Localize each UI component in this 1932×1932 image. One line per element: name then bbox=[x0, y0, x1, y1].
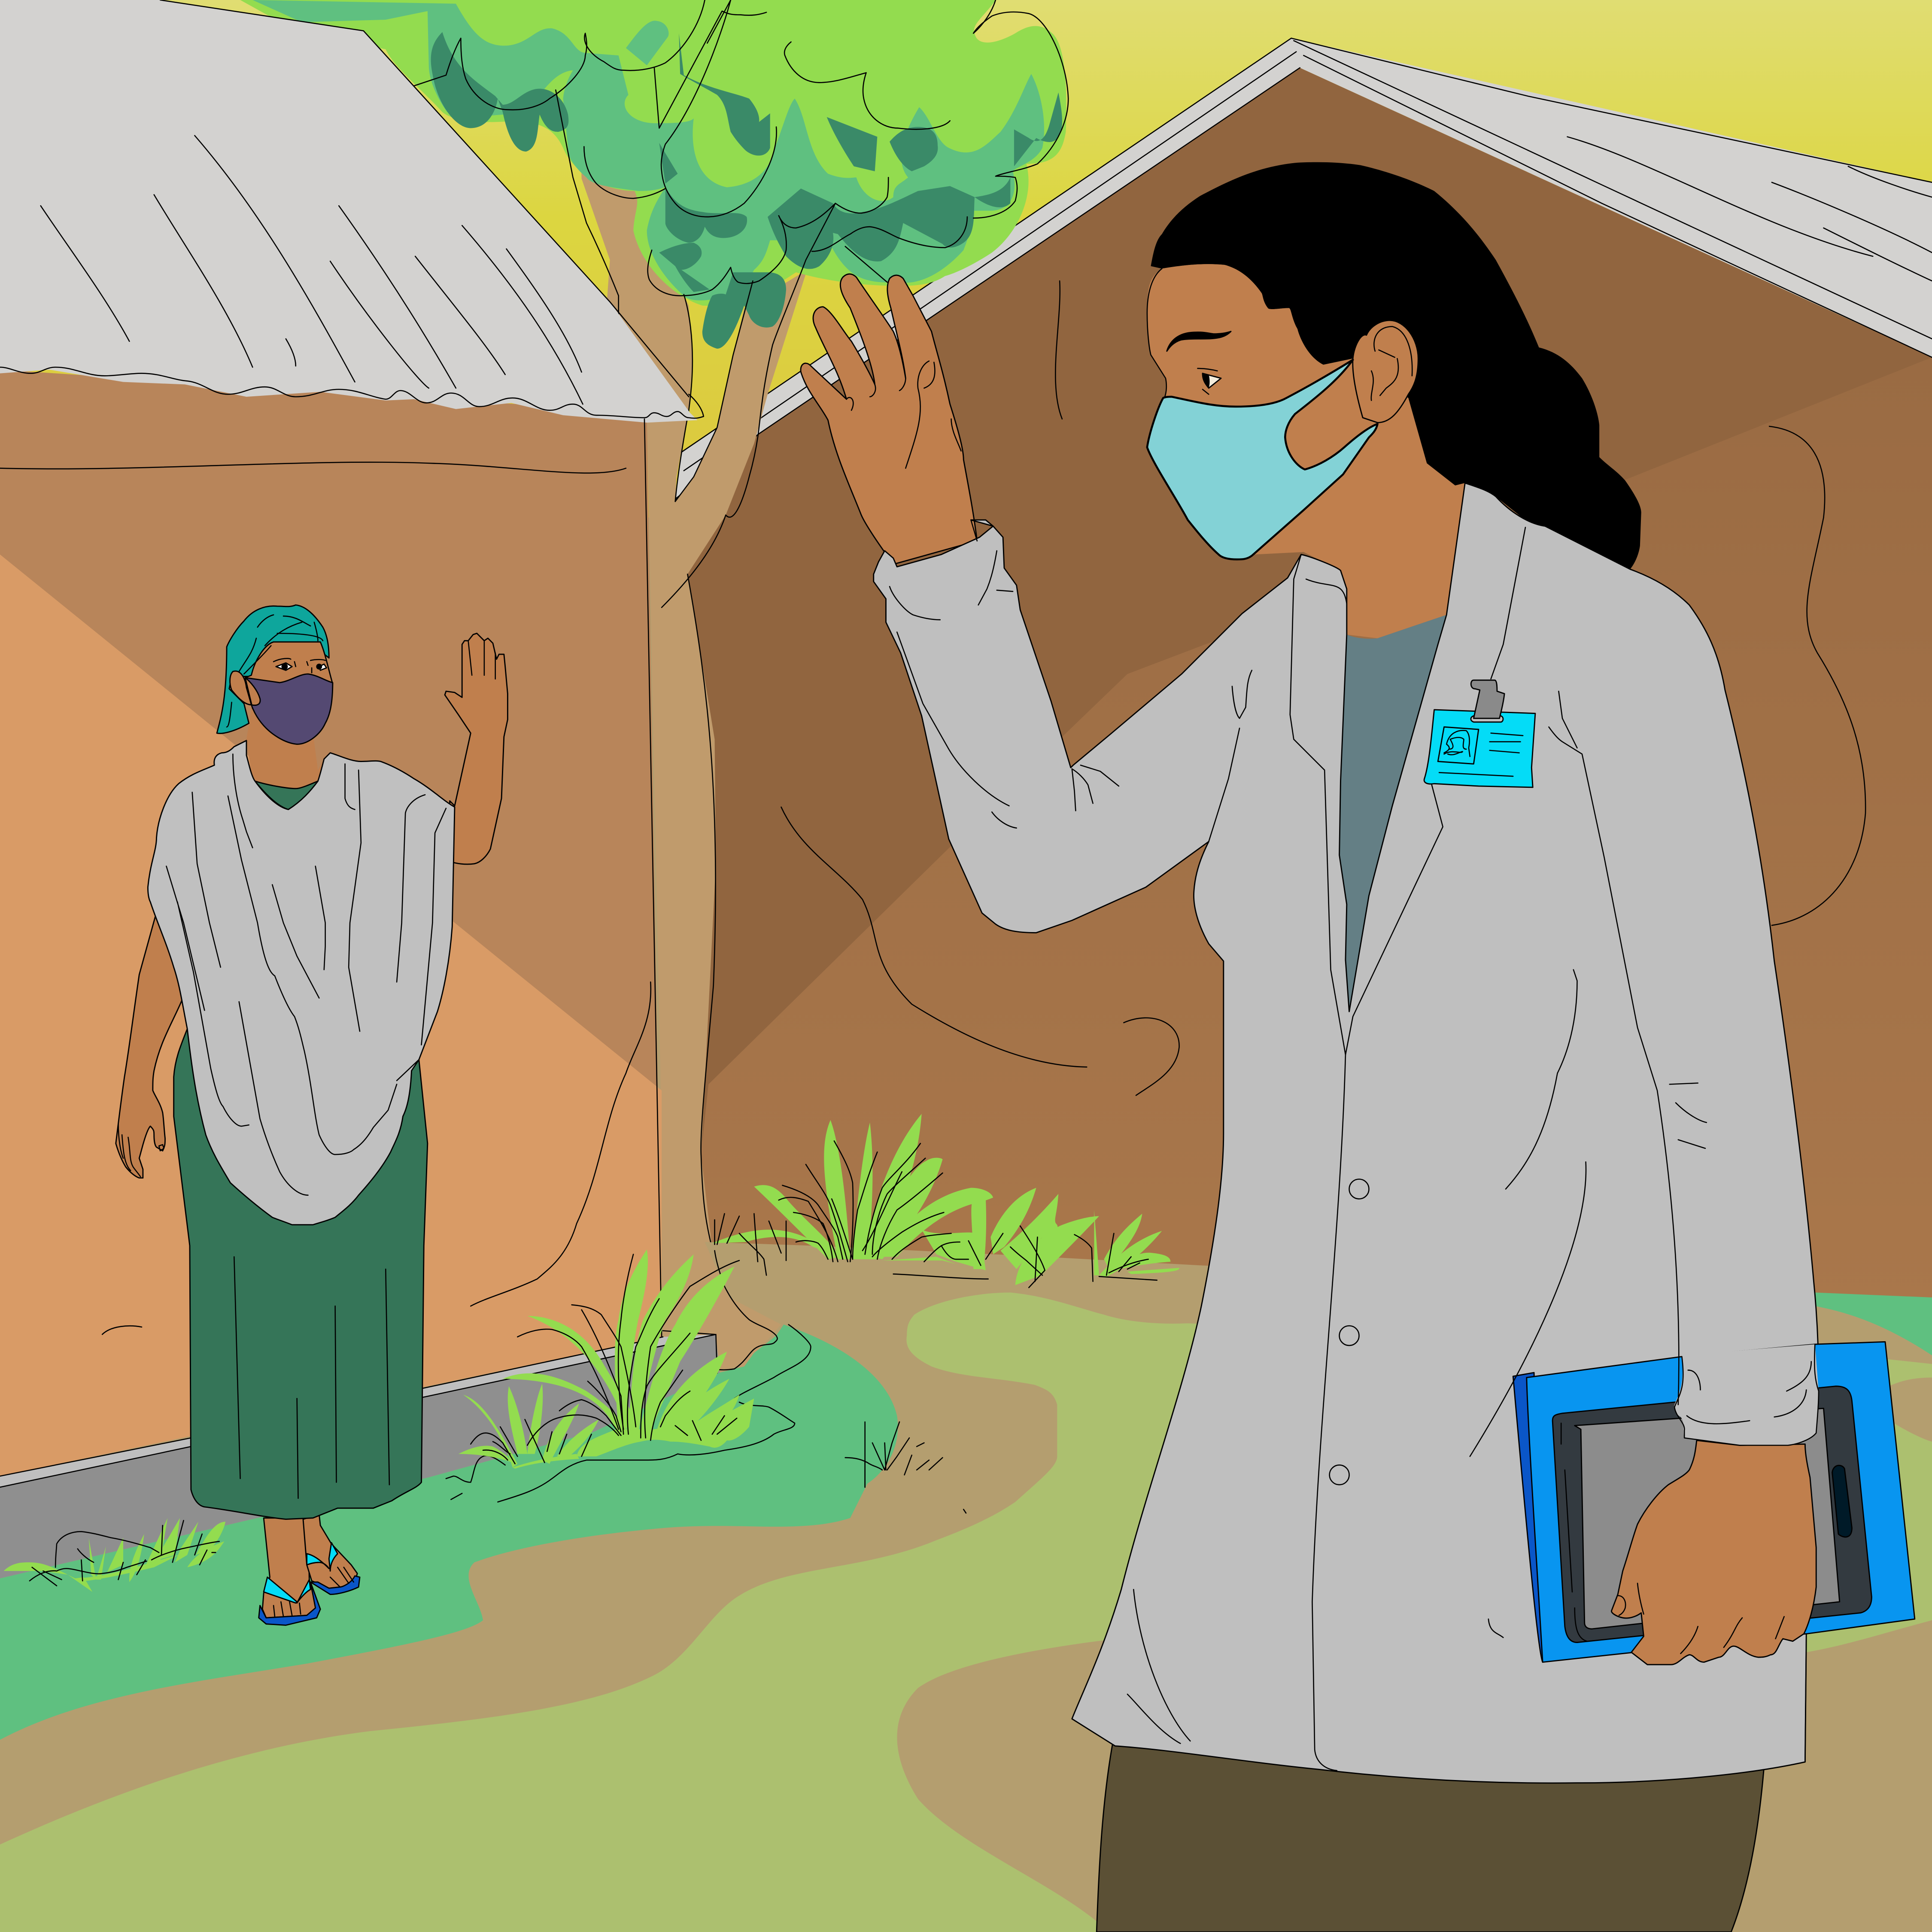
folder spine bbox=[1513, 1373, 1543, 1662]
woman undershirt bbox=[255, 781, 318, 810]
folder and tablet bbox=[1513, 1342, 1915, 1662]
ground bbox=[0, 1242, 1932, 1932]
doctor bbox=[801, 162, 1915, 1932]
woman skirt folds bbox=[234, 1257, 389, 1498]
woman on the left bbox=[116, 605, 507, 1625]
badge photo bbox=[1438, 727, 1479, 764]
woman face bbox=[245, 642, 333, 727]
badge clip bbox=[1471, 680, 1504, 718]
foliage dark layer bbox=[431, 32, 1062, 349]
doctor face and neck bbox=[1147, 264, 1465, 638]
doctor eye bbox=[1198, 368, 1221, 394]
coat sleeve cuff over folder bbox=[1674, 1344, 1819, 1445]
tree bbox=[240, 0, 1068, 1370]
doctor coat detail lines bbox=[890, 520, 1811, 1771]
doctor ear bbox=[1353, 320, 1418, 422]
left house roof bbox=[0, 0, 697, 422]
foliage light layer bbox=[240, 0, 1066, 306]
light green grass right bbox=[1806, 1343, 1932, 1653]
right house roof bbox=[675, 38, 1932, 499]
sky background bbox=[0, 0, 1932, 517]
woman mask bbox=[245, 674, 333, 744]
woman shawl bbox=[148, 741, 455, 1225]
woman left hand detail bbox=[118, 1124, 164, 1177]
right wall crack lines bbox=[781, 281, 1865, 1095]
woman skirt bbox=[174, 1029, 428, 1519]
left house foundation bbox=[0, 1334, 720, 1578]
left house bbox=[0, 0, 720, 1578]
left house wall bbox=[0, 370, 662, 1476]
right house roof lines bbox=[675, 38, 1932, 499]
grass tuft: by the wall bbox=[459, 1249, 754, 1469]
teal grass left bbox=[0, 1324, 898, 1740]
ground contour lines bbox=[446, 1251, 966, 1513]
foliage mid layer bbox=[252, 0, 1044, 301]
foliage mid leaf bbox=[626, 21, 669, 65]
left house lit wall bbox=[0, 554, 662, 1476]
doctor trousers bbox=[1097, 1744, 1765, 1932]
right house lit wall bbox=[690, 357, 1932, 1306]
doctor raised hand bbox=[801, 274, 977, 564]
left house roof lines bbox=[0, 0, 704, 1337]
doctor coat body and arms bbox=[874, 483, 1819, 1783]
right house bbox=[675, 38, 1932, 1306]
woman raised hand finger lines bbox=[468, 641, 495, 679]
coat buttons bbox=[1330, 1179, 1369, 1485]
woman left arm bbox=[116, 917, 185, 1178]
doctor eyebrow bbox=[1167, 331, 1231, 351]
teal grass right bbox=[1815, 1293, 1932, 1355]
woman neck bbox=[246, 702, 324, 813]
doctor hand detail bbox=[847, 361, 961, 468]
woman eyes bbox=[273, 659, 327, 673]
doctor lower hand bbox=[1611, 1440, 1816, 1665]
doctor hair bbox=[1151, 162, 1641, 569]
doctor mask bbox=[1147, 360, 1378, 559]
grass tuft: centre back bbox=[712, 1114, 1179, 1288]
woman shawl folds bbox=[166, 754, 446, 1195]
tan dirt ground bbox=[0, 1242, 1932, 1932]
tree outline lines bbox=[409, 0, 1068, 1248]
id badge bbox=[1424, 680, 1535, 787]
doctor lower hand detail bbox=[1618, 1583, 1784, 1653]
tablet slot bbox=[1832, 1465, 1852, 1537]
grass tuft: small dry path tuft bbox=[845, 1422, 942, 1487]
right house shaded wall bbox=[675, 68, 1932, 1306]
tree trunk bbox=[579, 33, 807, 1370]
woman headscarf bbox=[217, 605, 329, 733]
doctor ear detail bbox=[1371, 327, 1412, 401]
badge clip hole bbox=[1471, 716, 1503, 722]
folder cover bbox=[1527, 1342, 1915, 1662]
woman legs bbox=[262, 1518, 317, 1618]
doctor undershirt bbox=[1340, 615, 1446, 1012]
woman ear bbox=[230, 671, 251, 705]
tablet screen bbox=[1575, 1408, 1840, 1629]
woman headscarf folds bbox=[227, 615, 323, 727]
foundation lines bbox=[0, 1331, 718, 1487]
grass tuft: lower left bbox=[4, 1518, 225, 1592]
foundation pale strip bbox=[0, 1334, 715, 1487]
woman sandals bbox=[259, 1543, 360, 1625]
woman raised arm and hand bbox=[445, 633, 507, 864]
light green grass foreground bbox=[0, 1293, 1232, 1932]
woman back leg bbox=[303, 1514, 357, 1588]
tablet body bbox=[1552, 1386, 1871, 1643]
